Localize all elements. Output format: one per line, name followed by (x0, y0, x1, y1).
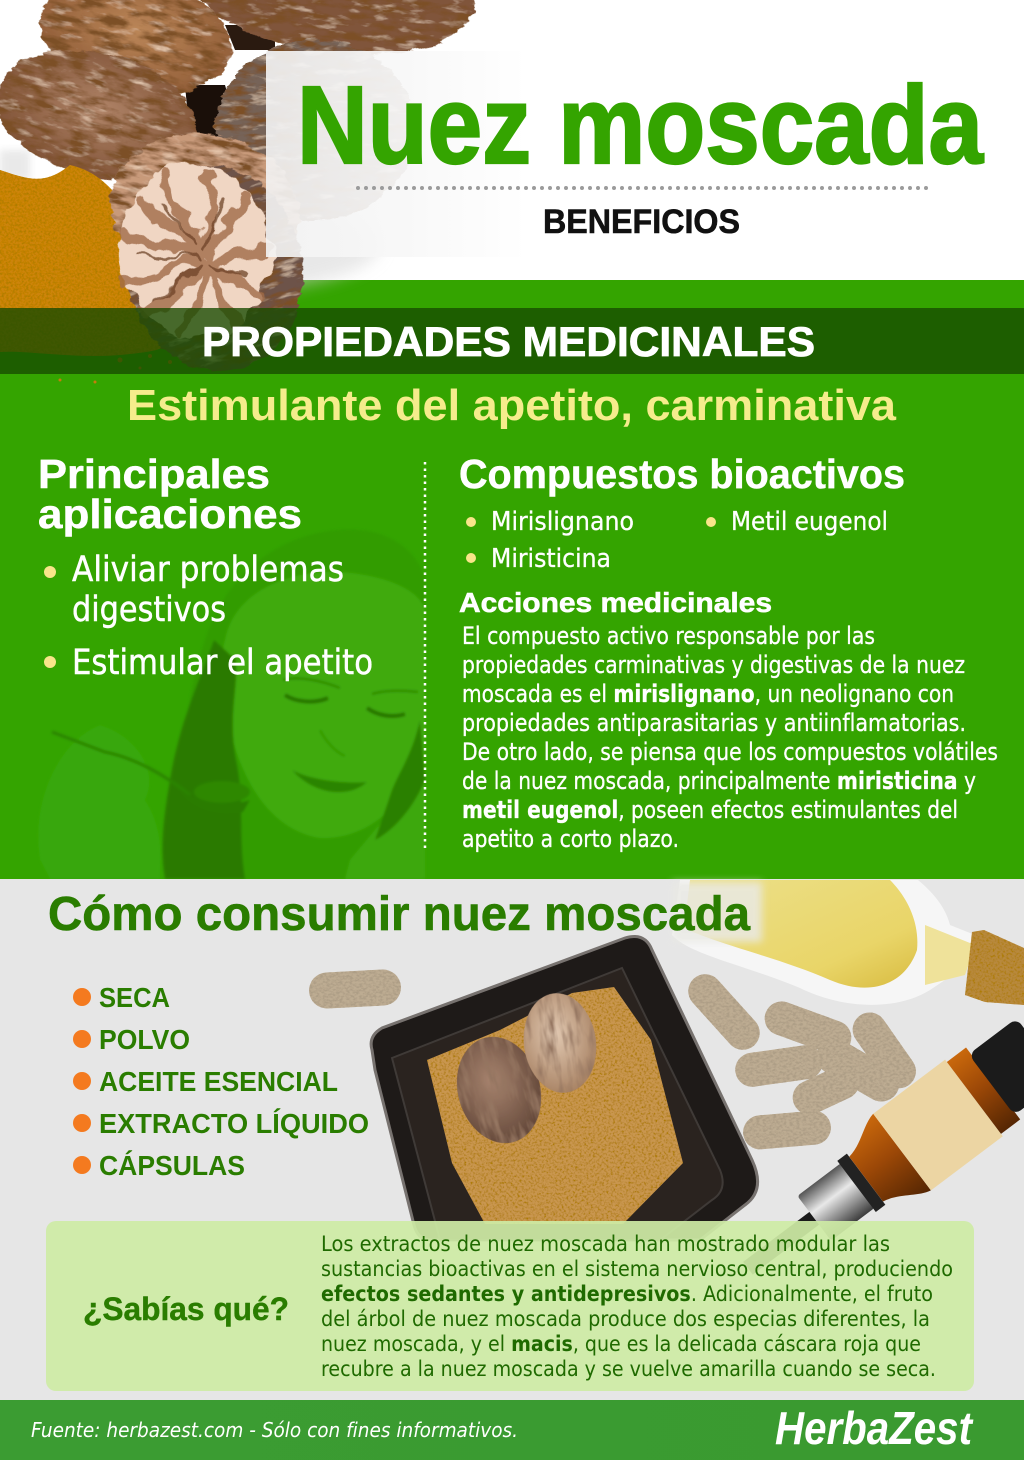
dotted column divider (424, 462, 426, 850)
callout text: recubre a la nuez moscada y se vuelve amarilla cuando se seca. (321, 1357, 936, 1381)
image: woman eating, green duotone (38, 530, 425, 879)
list: applications: Aliviar problemas (72, 550, 344, 590)
text block: medicinal actions: El compuesto activo responsable por las (462, 622, 875, 650)
title backing panel (266, 51, 526, 257)
list: compounds: Miristicina (491, 544, 611, 574)
callout text: del árbol de nuez moscada produce dos especias diferentes, la (321, 1307, 930, 1331)
heading: compuestos bioactivos: Compuestos bioactivos (459, 451, 905, 497)
text block: medicinal actions (462, 622, 998, 853)
list: forms of consumption: POLVO (99, 1024, 190, 1055)
list: forms of consumption: CÁPSULAS (99, 1150, 245, 1181)
image: oil bottle (672, 880, 1024, 1005)
image: nutmeg seeds and powder (0, 0, 480, 390)
heading band: propiedades medicinales: PROPIEDADES MEDICINALES (202, 318, 815, 365)
heading: principales aplicaciones (38, 451, 302, 537)
list: compounds: Mirislignano (491, 507, 634, 537)
footer (0, 1400, 1024, 1460)
subheading: properties: Estimulante del apetito, carminativa (127, 381, 897, 430)
heading: how to consume: Cómo consumir nuez moscada (48, 888, 750, 941)
list: compounds: Metil eugenol (731, 507, 888, 537)
panel: green properties section (0, 280, 1024, 879)
text block: medicinal actions: apetito a corto plazo. (462, 825, 679, 853)
callout: did you know (46, 1221, 974, 1391)
list: forms of consumption: EXTRACTO LÍQUIDO (99, 1108, 369, 1139)
heading: principales aplicaciones: aplicaciones (38, 491, 302, 537)
callout text: Los extractos de nuez moscada han mostrado modular las (321, 1232, 890, 1256)
callout heading: ¿Sabías qué? (83, 1291, 289, 1327)
image: capsules (308, 967, 923, 1151)
text block: medicinal actions: de la nuez moscada, principalmente miristicina y (462, 767, 976, 795)
heading: acciones medicinales: Acciones medicinales (459, 587, 772, 618)
dotted divider (358, 186, 928, 190)
heading: principales aplicaciones: Principales (38, 451, 270, 497)
list: forms of consumption: ACEITE ESENCIAL (99, 1066, 338, 1097)
image: bowl with nutmeg (371, 936, 758, 1240)
panel: how to consume (0, 879, 1024, 1400)
callout text: nuez moscada, y el macis, que es la delicada cáscara roja que (321, 1332, 921, 1356)
source note: Fuente: herbazest.com - Sólo con fines informativos. (31, 1418, 518, 1442)
logo: HerbaZest (775, 1402, 973, 1454)
image: dropper bottle (719, 1010, 1024, 1307)
text block: medicinal actions: moscada es el mirislignano, un neolignano con (462, 680, 954, 708)
list: applications (44, 550, 373, 683)
list: forms of consumption (73, 982, 369, 1181)
callout text: sustancias bioactivas en el sistema nervioso central, produciendo (321, 1257, 953, 1281)
list: applications: digestivos (72, 590, 226, 630)
callout text: efectos sedantes y antidepresivos. Adicionalmente, el fruto (321, 1282, 933, 1306)
panel fade: title right side (526, 51, 1024, 257)
callout text (321, 1232, 953, 1381)
list: forms of consumption: SECA (99, 982, 170, 1013)
heading band: propiedades medicinales (0, 308, 1024, 374)
subtitle: BENEFICIOS (543, 203, 740, 241)
list: applications: Estimular el apetito (72, 643, 373, 683)
text block: medicinal actions: metil eugenol, poseen efectos estimulantes del (462, 796, 958, 824)
list: compounds (466, 507, 888, 574)
